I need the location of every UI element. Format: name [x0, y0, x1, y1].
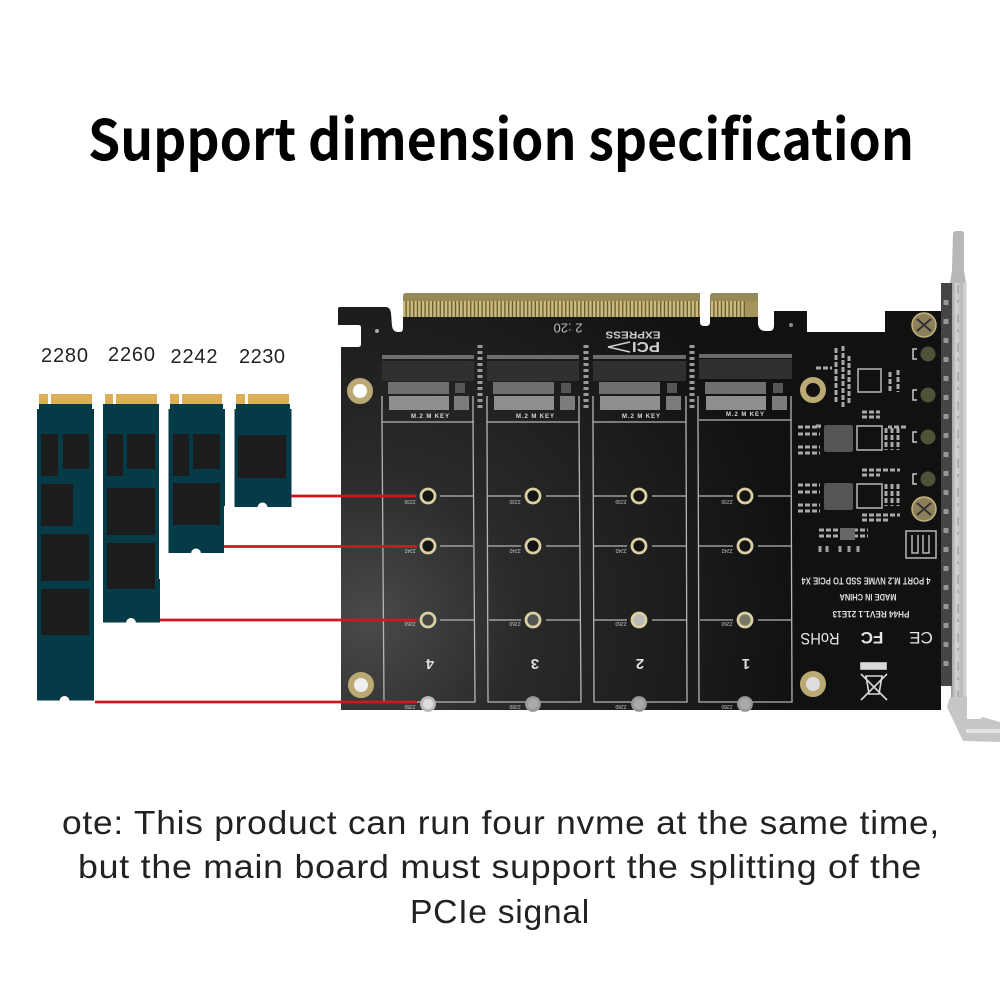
slot 4 (left): 2280 [404, 703, 416, 709]
slot 1 (right) [698, 354, 792, 709]
slot 4 (left): 2242 [404, 547, 416, 553]
slot 1 (right): 2260 [721, 620, 733, 626]
slot 4 (left): 2260 [404, 620, 416, 626]
module 2260: 2260 [108, 344, 155, 366]
product text (upside down): 4 PORT M.2 NVME SSD TO PCIE X4 [801, 574, 930, 586]
inductors [824, 425, 853, 510]
note text: PCIe signal [410, 893, 590, 930]
antenna trace [906, 531, 936, 558]
red guide lines [95, 496, 417, 702]
product text (upside down): MADE IN CHINA [839, 592, 896, 602]
standoff holes [421, 489, 752, 710]
slot 3: 2280 [509, 703, 521, 709]
slot 2: 2260 [615, 620, 627, 626]
module 2230 [234, 346, 292, 512]
status LEDs [913, 346, 936, 486]
slot 1 (right): M.2 M KEY [726, 412, 764, 418]
bracket screws [912, 313, 936, 521]
module 2230: 2230 [239, 346, 285, 368]
PCIe adapter board [338, 293, 941, 710]
slot 3: M.2 M KEY [516, 414, 554, 420]
slot 4 (left): M.2 M KEY [411, 414, 449, 420]
power circuitry components [798, 346, 936, 558]
slot 4 (left): 2230 [404, 498, 416, 504]
note text: but the main board must support the splitting of the [78, 848, 922, 885]
module 2280: 2280 [41, 345, 88, 367]
compliance marks: FC [861, 628, 883, 647]
module 2242: 2242 [170, 346, 218, 368]
PCB outline [338, 307, 941, 710]
PCI Express logo: EXPRESS [605, 328, 660, 340]
metal bracket [941, 231, 1000, 742]
note text [62, 804, 940, 930]
slot 2 [593, 355, 687, 709]
PCI Express logo: PCI [632, 338, 660, 355]
mounting holes [350, 380, 823, 695]
slot 1 (right): 2242 [721, 547, 733, 553]
module 2280 [37, 345, 94, 706]
module 2260 [103, 344, 160, 628]
via strips between slots [480, 345, 692, 408]
gold fingers [403, 293, 758, 318]
title: Support dimension specification [88, 96, 914, 177]
PCI Express logo [605, 328, 660, 355]
slot 2: 2242 [615, 547, 627, 553]
panel: M.2 SSD size modules [37, 344, 292, 706]
slot 3: 3 [531, 655, 539, 672]
product text (upside down) [801, 574, 930, 619]
slot 3: 2242 [509, 547, 521, 553]
slot 4 (left) [382, 355, 475, 709]
compliance marks: CE [909, 628, 933, 647]
passive parts [798, 346, 906, 536]
slot 3: 2230 [509, 498, 521, 504]
slot 2: 2280 [615, 703, 627, 709]
slot 2: 2230 [615, 498, 627, 504]
PCB markings: 2 :20 [554, 320, 582, 336]
note text: ote: This product can run four nvme at the same time, [62, 804, 940, 841]
slot 3 [487, 355, 581, 709]
slot 1 (right): 2230 [721, 498, 733, 504]
compliance marks [800, 628, 933, 700]
slot 4 (left): 4 [425, 655, 434, 672]
controller chips [857, 369, 882, 508]
slot 2: 2 [636, 655, 644, 672]
slot 1 (right): 1 [742, 655, 750, 672]
icon: WEEE crossed bin [861, 663, 887, 700]
slot 3: 2260 [509, 620, 521, 626]
slot 2: M.2 M KEY [622, 414, 660, 420]
PCB markings [375, 320, 793, 408]
module 2242 [168, 346, 225, 558]
compliance marks: RoHS [800, 629, 840, 648]
product text (upside down): PH44 REV1.1 21E13 [832, 609, 910, 619]
slot 1 (right): 2280 [721, 703, 733, 709]
